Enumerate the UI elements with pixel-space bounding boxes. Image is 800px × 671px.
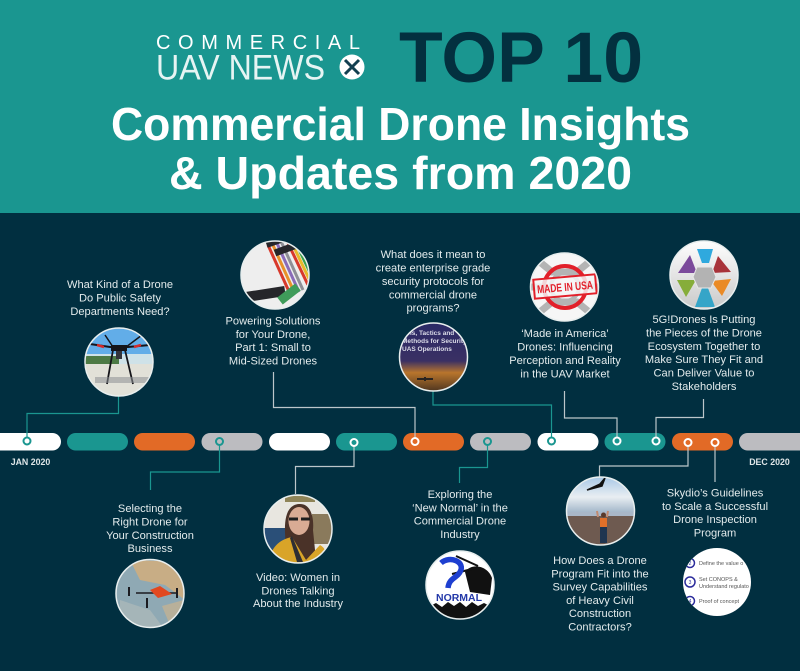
photo: construction drone [115, 559, 185, 630]
text: heavy civil: of Heavy Civil [566, 595, 634, 607]
text: public safety drone: Departments Need? [70, 306, 170, 318]
text: 5G!Drones: Can Deliver Value to [654, 368, 754, 380]
text: women in drones: Video: Women in [256, 572, 340, 584]
text: women in drones: Drones Talking [261, 586, 335, 598]
connector 5 [460, 441, 488, 483]
connector 9 [600, 442, 688, 477]
text: Skydio guidelines: Program [694, 528, 736, 540]
text: heavy civil: Contractors? [568, 622, 632, 634]
text: powering solutions: Part 1: Small to [235, 342, 311, 354]
text: heavy civil: Construction [569, 608, 631, 620]
text: women in drones: About the Industry [253, 598, 343, 610]
text: new normal: Exploring the [428, 489, 492, 501]
title: & Updates from 2020 [169, 147, 632, 199]
photo: security document: ools, Tactics and [402, 330, 454, 337]
text: security protocols: commercial drone [389, 290, 477, 302]
graphic: Skydio checklist: Set CONOPS & [699, 577, 738, 583]
connector 6 [433, 391, 552, 441]
label: Dec 2020: DEC 2020 [749, 457, 790, 467]
graphic: Skydio checklist: Understand regulato [699, 584, 749, 590]
label: Jan 2020: JAN 2020 [11, 457, 50, 467]
text: heavy civil: Survey Capabilities [553, 582, 648, 594]
text: public safety drone: What Kind of a Drone [67, 279, 173, 291]
graphic: Skydio checklist [683, 548, 751, 616]
text: security protocols: What does it mean to [381, 249, 485, 261]
text: heavy civil: Program Fit into the [551, 568, 649, 580]
photo: security document [399, 323, 468, 392]
text: construction drone: Business [127, 543, 173, 555]
text: new normal: Industry [440, 529, 480, 541]
logo: Commercial UAV News [156, 32, 364, 88]
text: 5G!Drones: Stakeholders [672, 381, 737, 393]
text: made in America: ‘Made in America’ [521, 328, 609, 340]
title: Commercial Drone Insights [111, 98, 690, 150]
text: Skydio guidelines: to Scale a Successful [662, 501, 768, 513]
photo: public safety drone [85, 328, 153, 396]
photo: Made in USA stamp: MADE IN USA [537, 280, 594, 296]
graphic: Skydio checklist: Define the value o [699, 561, 743, 567]
connector 8 [656, 399, 704, 441]
timeline markers [24, 438, 718, 446]
timeline bar [0, 433, 800, 450]
graphic: Skydio checklist: 2 [689, 561, 692, 567]
text: made in America: Drones: Influencing [517, 342, 613, 354]
header panel [0, 0, 800, 213]
text: security protocols: security protocols for [382, 276, 484, 288]
graphic: Skydio checklist: 4 [689, 599, 692, 605]
logo: Commercial UAV News: COMMERCIAL [156, 32, 360, 54]
connector 1 [27, 392, 118, 441]
text: construction drone: Selecting the [118, 503, 182, 515]
photo: security document: UAS Operations [402, 346, 452, 353]
text: 5G!Drones: the Pieces of the Drone [646, 328, 762, 340]
connector 2 [150, 441, 220, 490]
text: powering solutions: for Your Drone, [236, 329, 310, 341]
text: Skydio guidelines: Skydio’s Guidelines [667, 488, 764, 500]
title [111, 98, 690, 199]
text: security protocols: create enterprise grade [376, 262, 490, 274]
text: construction drone: Your Construction [106, 530, 194, 542]
photo: heavy civil survey [566, 477, 636, 546]
text: Skydio guidelines: Drone Inspection [673, 514, 757, 526]
photo: woman speaker [263, 494, 334, 566]
connector 7 [564, 391, 617, 441]
text: construction drone: Right Drone for [112, 516, 188, 528]
graphic: Skydio checklist: 3 [689, 580, 692, 586]
connector 3 [296, 442, 354, 494]
text: powering solutions: Mid-Sized Drones [229, 356, 318, 368]
text: public safety drone: Do Public Safety [79, 292, 161, 304]
text: security protocols: programs? [406, 302, 460, 314]
connector 4 [274, 372, 415, 442]
text: made in America: in the UAV Market [520, 368, 610, 380]
photo: security document: Methods for Security [402, 338, 467, 345]
photo: cables [240, 240, 310, 310]
connector 10 [714, 442, 716, 482]
text: 5G!Drones: Make Sure They Fit and [645, 354, 763, 366]
graphic: Skydio checklist: Proof of concept [699, 599, 740, 605]
text: 5G!Drones: 5G!Drones Is Putting [653, 314, 755, 326]
text: powering solutions: Powering Solutions [226, 316, 321, 328]
photo: new normal: NORMAL [436, 592, 483, 604]
logo: Commercial UAV News: UAV NEWS [156, 48, 325, 88]
text: heavy civil: How Does a Drone [553, 555, 647, 567]
text: new normal: ‘New Normal’ in the [412, 502, 508, 514]
text: made in America: Perception and Reality [509, 355, 621, 367]
photo: new normal [425, 550, 495, 620]
photo: 5G!Drones ecosystem [669, 240, 739, 310]
text: new normal: Commercial Drone [414, 516, 506, 528]
photo: Made in USA stamp [528, 252, 602, 322]
text: 5G!Drones: Ecosystem Together to [648, 341, 760, 353]
heading: TOP 10: TOP 10 [399, 19, 643, 98]
